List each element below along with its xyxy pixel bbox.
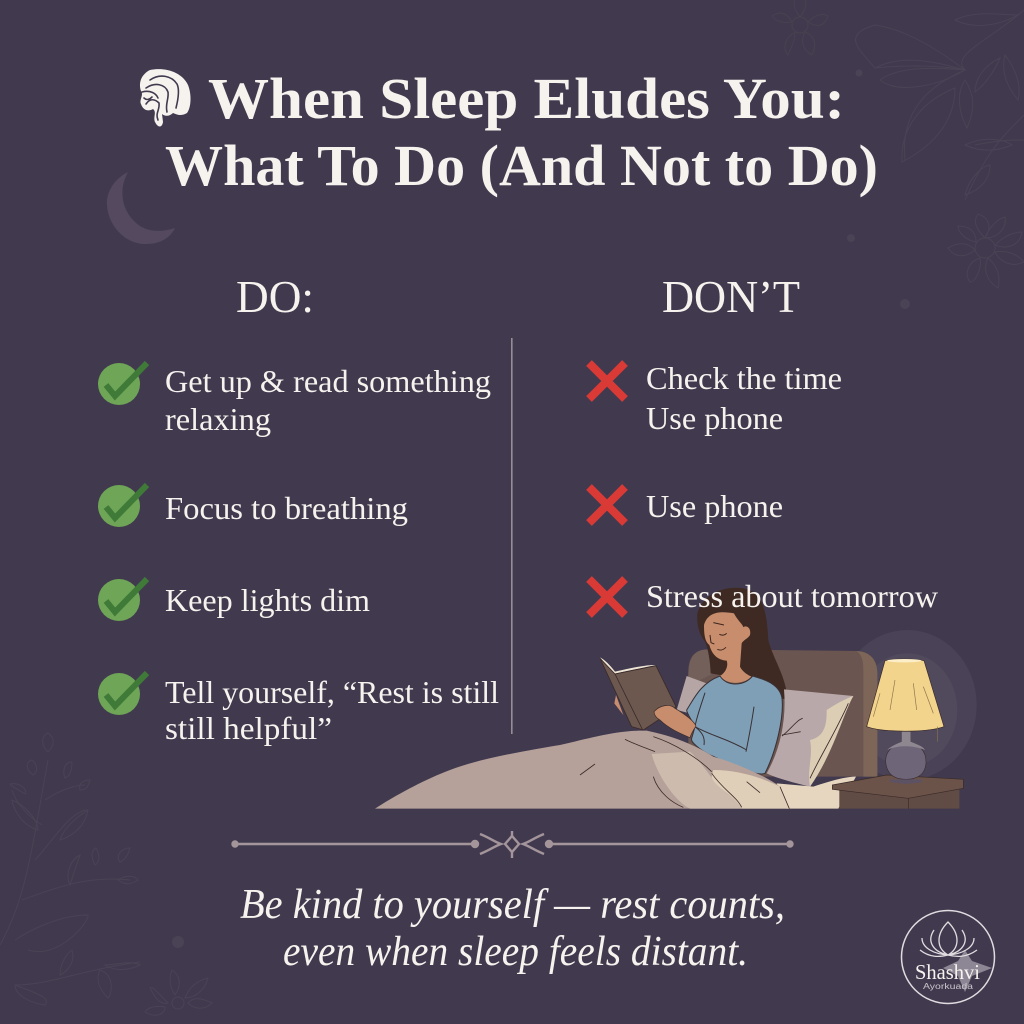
illustration: woman reading in bed xyxy=(375,588,977,809)
sweater xyxy=(687,676,782,774)
hair xyxy=(697,588,787,700)
item: get up and read xyxy=(98,363,491,437)
table lamp xyxy=(867,659,944,784)
item: use phone: Use phone xyxy=(646,488,783,524)
item: check the time: Use phone xyxy=(646,400,783,436)
logo: Shashvi lotus badge xyxy=(902,910,994,1004)
hand xyxy=(654,705,696,738)
mattress sheet xyxy=(777,777,856,809)
item: keep lights dim: Keep lights dim xyxy=(165,582,370,618)
item: keep lights dim xyxy=(98,579,370,621)
ornamental divider xyxy=(232,831,792,858)
faint dots xyxy=(172,70,910,948)
decorative flower: top xyxy=(772,0,828,55)
item: focus on breathing: Focus to breathing xyxy=(165,490,408,526)
icon: crescent moon xyxy=(107,172,175,244)
title xyxy=(165,66,878,198)
back pillow xyxy=(677,676,707,713)
decorative leaves: top right xyxy=(856,10,1024,200)
item: check the time xyxy=(589,360,842,436)
item: stress about tomorrow: Stress about tomorrow xyxy=(646,578,938,614)
item: get up and read: relaxing xyxy=(165,401,271,437)
panel: do list xyxy=(98,363,499,746)
logo: Shashvi lotus badge: Shashvi xyxy=(915,960,980,984)
decorative flower: bottom xyxy=(145,970,212,1015)
item: tell yourself xyxy=(98,673,499,746)
center divider xyxy=(511,338,513,734)
title: What To Do (And Not to Do) xyxy=(165,133,878,198)
face and neck xyxy=(704,612,752,683)
icon: brain head xyxy=(140,69,191,126)
item: tell yourself: Tell yourself, “Rest is still xyxy=(165,674,499,710)
closing message: Be kind to yourself — rest counts, xyxy=(240,882,785,928)
headboard xyxy=(688,649,877,777)
title: When Sleep Eludes You: xyxy=(208,66,845,131)
facial features xyxy=(710,623,727,650)
item: get up and read: Get up & read something xyxy=(165,363,491,399)
item: focus on breathing xyxy=(98,485,408,527)
panel: don't list xyxy=(589,360,938,615)
item: check the time: Check the time xyxy=(646,360,842,396)
heading: do: DO: xyxy=(236,271,314,322)
item: tell yourself: still helpful” xyxy=(165,710,332,746)
blanket xyxy=(375,731,789,809)
closing message: even when sleep feels distant. xyxy=(283,929,748,975)
decorative branch: bottom left xyxy=(0,733,140,1005)
item: use phone xyxy=(589,487,783,524)
nightstand xyxy=(832,775,963,809)
book xyxy=(600,657,676,730)
decorative flower: right xyxy=(948,214,1024,288)
logo: Shashvi lotus badge: Ayorkuada xyxy=(923,982,974,991)
closing message xyxy=(240,882,785,975)
front pillow xyxy=(767,689,853,787)
heading: don't: DON’T xyxy=(662,271,800,322)
lamp glow xyxy=(838,630,977,780)
